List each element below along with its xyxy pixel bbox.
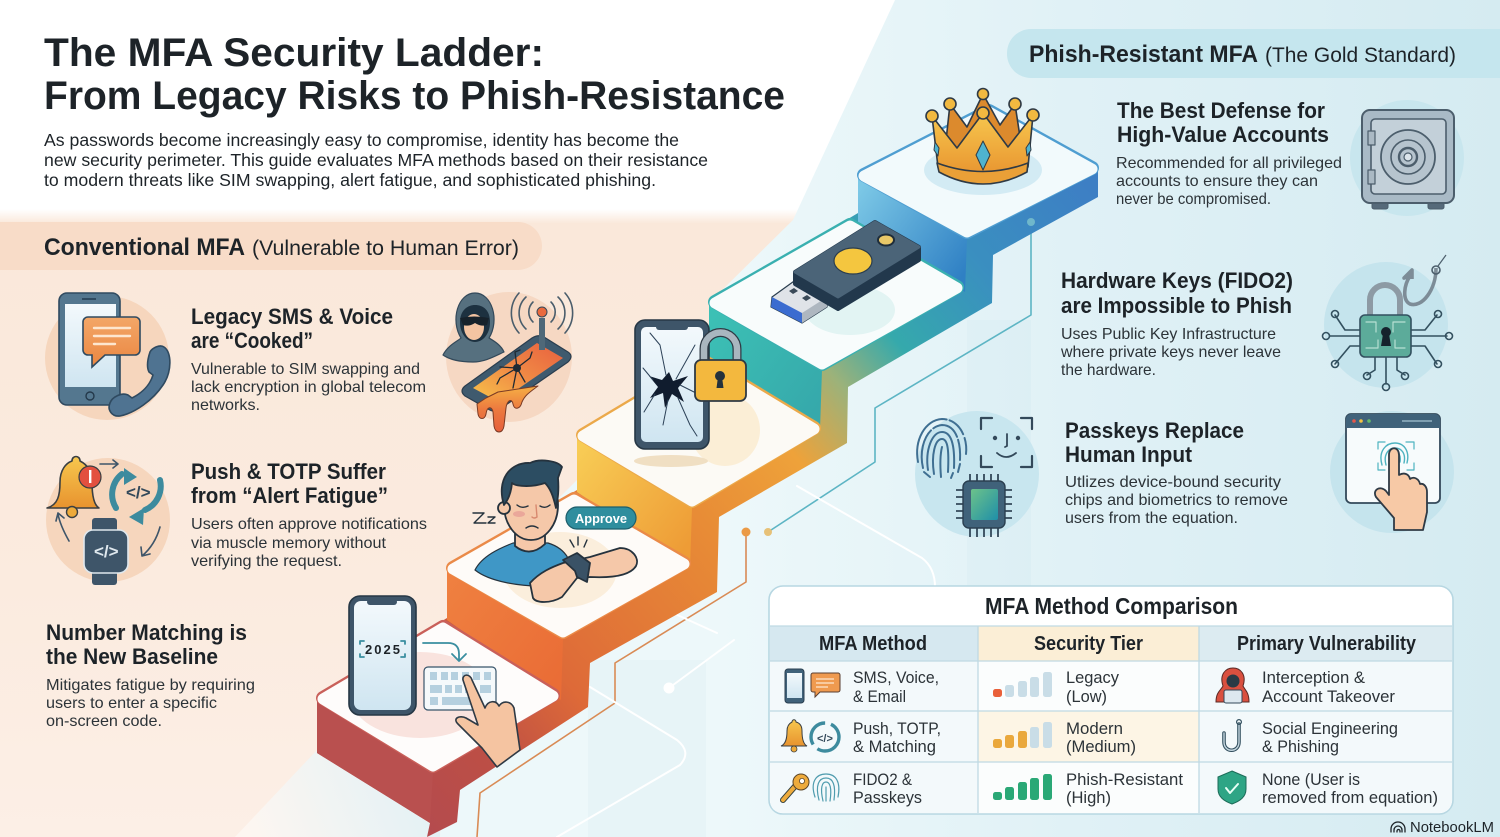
body text: users to enter a specific [46,695,217,712]
table header: Primary Vulnerability [1237,633,1417,655]
heading: Push & TOTP Suffer [191,459,386,484]
body text: chips and biometrics to remove [1065,492,1288,509]
table header: MFA Method [819,633,927,655]
body text: on-screen code. [46,713,162,730]
table header [819,633,1417,655]
icon: approve button: Approve [575,511,627,526]
heading: Human Input [1065,442,1193,467]
heading [191,459,388,508]
body text: verifying the request. [191,553,342,570]
comparison table [769,586,1453,814]
tier label: Legacy [1066,668,1119,687]
body text: via muscle memory without [191,535,387,552]
body text: accounts to ensure they can [1116,173,1318,190]
heading: the New Baseline [46,644,218,669]
row: SMS, voice, email [785,668,1395,706]
step faces [317,175,967,823]
row: push, TOTP, matching [781,719,1398,756]
heading: are Impossible to Phish [1061,293,1292,318]
tier label: Modern [1066,719,1123,738]
method label: Passkeys [853,788,922,807]
circuit lines behind ladder [477,222,1031,837]
tier label: (Low) [1066,687,1107,706]
icon: phone and message [785,669,840,703]
body text [191,361,426,414]
icon: phone, message and handset [45,293,170,420]
title: From Legacy Risks to Phish-Resistance [44,74,785,118]
heading: The Best Defense for [1117,98,1325,123]
heading: Hardware Keys (FIDO2) [1061,268,1293,293]
body text [46,677,255,730]
icon: fishing hook [1224,720,1241,750]
tier label [1066,719,1136,756]
method label: FIDO2 & [853,770,913,789]
icon: hooded hacker [1216,668,1249,703]
icon: phone with code and keyboard: 2025 [365,642,400,657]
intro text [44,130,708,190]
heading: from “Alert Fatigue” [191,483,388,508]
icon: bell and refresh [781,720,839,752]
icon: crown [924,88,1042,195]
body text [1116,155,1342,208]
title [44,31,785,118]
step 3 plate: broken phone [583,362,814,501]
panel: number matching [46,620,255,730]
vulnerability label: removed from equation) [1262,788,1438,807]
body text: the hardware. [1061,362,1156,379]
body text [1060,326,1281,379]
table title: MFA Method Comparison [985,593,1238,619]
ladder staircase [317,105,1098,837]
body text: lack encryption in global telecom [191,379,426,396]
heading [191,304,393,353]
table rows background [770,626,1452,813]
heading: are “Cooked” [191,328,313,353]
title: The MFA Security Ladder: [44,31,544,75]
step 5 plate: crown [864,111,1092,232]
body text: Mitigates fatigue by requiring [46,677,255,694]
method label: & Email [853,687,906,706]
tier label [1066,668,1119,706]
NotebookLM logo: NotebookLM [1410,819,1494,836]
icon: tapping hand [456,675,520,767]
section banner: conventional MFA: (Vulnerable to Human Error) [252,237,519,260]
icon: safe [1350,100,1464,216]
icon: fingerprint, face scan and chip [915,411,1039,537]
method label [853,719,941,756]
icon: green shield [1218,771,1246,804]
tier label: (Medium) [1066,737,1136,756]
icon: cracked phone and padlock [634,320,746,467]
vulnerability label [1262,770,1438,807]
step 4 plate: hardware key [715,225,957,364]
section banner: phish-resistant MFA: Phish-Resistant MFA [1029,41,1258,68]
heading [1117,98,1329,147]
step 2 plate: approve [453,499,684,632]
vulnerability label: Interception & [1262,668,1366,687]
method label: SMS, Voice, [853,668,939,687]
body text: never be compromised. [1116,191,1271,208]
vulnerability label: Social Engineering [1262,719,1398,738]
ladder ribbon sides [317,105,1098,837]
section banner: phish-resistant MFA [1007,29,1500,78]
body text: Recommended for all privileged [1116,155,1342,172]
body text [191,516,427,570]
intro text: to modern threats like SIM swapping, alert fatigue, and sophisticated phishing. [44,170,656,190]
vulnerability label: & Phishing [1262,737,1339,756]
heading [46,620,247,669]
body text: users from the equation. [1065,510,1238,527]
method label: & Matching [853,737,936,756]
table card [769,586,1453,814]
heading: High-Value Accounts [1117,122,1329,147]
vulnerability label [1262,719,1398,756]
vulnerability label: Account Takeover [1262,687,1395,706]
icon: phone with code and keyboard [349,596,496,715]
signal bars: high [993,774,1052,800]
icon: key and fingerprint [783,774,839,801]
background: cool right side [440,0,1500,837]
method label [853,668,939,706]
section banner: conventional MFA [0,222,542,270]
panel: push and TOTP [46,456,427,585]
section banner: phish-resistant MFA: (The Gold Standard) [1265,44,1456,67]
icon: approve button [566,507,636,529]
table header: Security Tier [1034,633,1143,655]
connector dot [1027,218,1035,226]
heading: Passkeys Replace [1065,418,1244,443]
vulnerability label [1262,668,1395,706]
signal bars: medium [993,722,1052,748]
icon: hardware security key [771,222,919,323]
heading: Number Matching is [46,620,247,645]
icon: browser window with touch [1330,411,1454,533]
row: FIDO2 and passkeys [783,770,1438,807]
tier label: Phish-Resistant [1066,770,1183,789]
icon: bell, code refresh and watch: </> [94,542,119,561]
section banner: conventional MFA: Conventional MFA [44,234,245,261]
panel: hardware keys [1060,255,1452,390]
tier label: (High) [1066,788,1111,807]
intro text: new security perimeter. This guide evaluates MFA methods based on their resistance [44,150,708,170]
method label [853,770,922,807]
body text: Users often approve notifications [191,516,427,533]
icon: circuit padlock and hook [1322,255,1452,390]
body text [1065,474,1288,527]
icon: hacker and melting phone [443,292,573,432]
panel: legacy SMS and voice [45,293,426,420]
icon: bell and refresh: </> [817,733,833,745]
heading: Legacy SMS & Voice [191,304,393,329]
body text: networks. [191,397,260,414]
body text: Utlizes device-bound security [1065,474,1281,491]
heading [1061,268,1293,318]
icon: bell, code refresh and watch: </> [126,483,151,502]
intro text: As passwords become increasingly easy to compromise, identity has become the [44,130,679,150]
background: lower-left cool wedge [235,750,440,837]
tier label [1066,770,1183,807]
panel: best defense [1116,98,1464,216]
icon: bell, code refresh and watch [46,456,170,585]
body text: where private keys never leave [1060,344,1281,361]
body text: Vulnerable to SIM swapping and [191,361,420,378]
panel: passkeys [915,411,1454,537]
icon: tired user with watch [473,460,637,602]
vulnerability label: None (User is [1262,770,1360,789]
heading [1065,418,1244,467]
signal bars: low [993,672,1052,697]
body text: Uses Public Key Infrastructure [1061,326,1276,343]
step 1 plate: number matching [323,627,553,766]
method label: Push, TOTP, [853,719,941,738]
